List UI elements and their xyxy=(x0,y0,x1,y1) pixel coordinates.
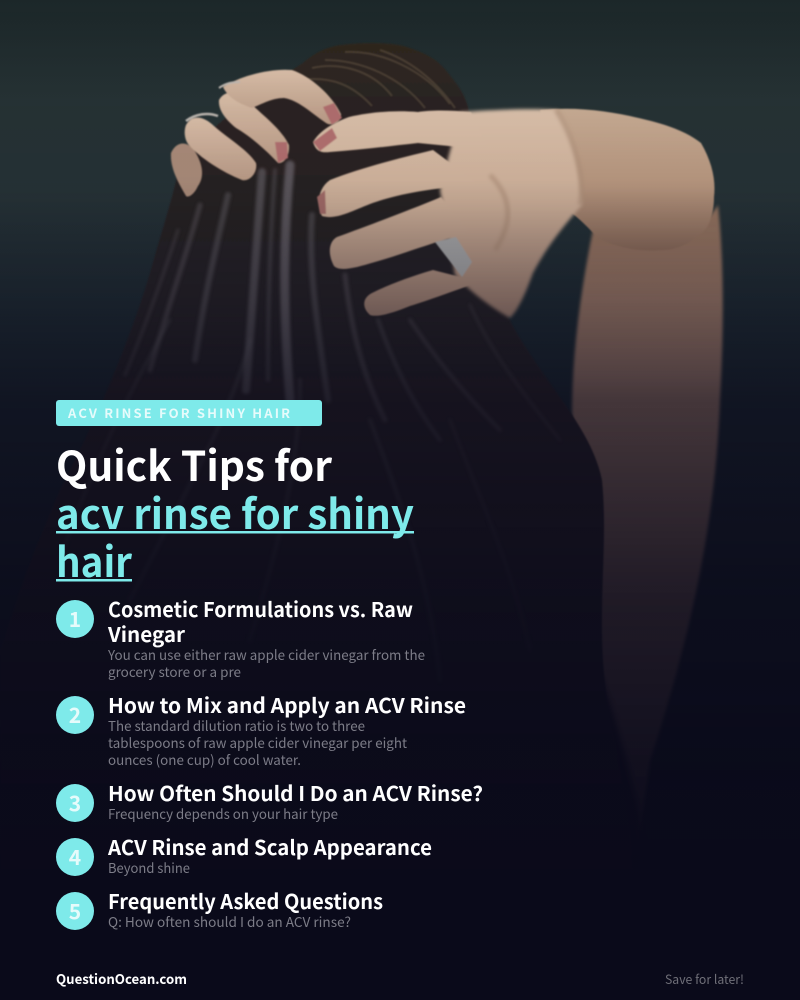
forearm xyxy=(540,109,714,251)
finger one xyxy=(223,70,341,124)
tip 3: Frequency depends on your hair type xyxy=(108,803,338,823)
tip 5: Q: How often should I do an ACV rinse? xyxy=(108,911,351,931)
title: acv rinse for shiny xyxy=(56,481,414,541)
middle finger xyxy=(319,150,480,217)
title: hair xyxy=(56,529,132,589)
tip 4: ACV Rinse and Scalp Appearance xyxy=(107,831,432,861)
upper arm xyxy=(560,205,723,830)
tip 1: Vinegar xyxy=(107,618,185,648)
tip 1 xyxy=(56,593,425,681)
badge: ACV RINSE FOR SHINY HAIR xyxy=(67,403,290,422)
tip 2: ounces (one cup) of cool water. xyxy=(108,749,301,769)
tip 4 xyxy=(56,831,432,877)
badge xyxy=(56,400,322,426)
title: Quick Tips for xyxy=(56,433,332,493)
tip 4: 4 xyxy=(69,842,81,872)
title xyxy=(56,433,414,589)
tip 2: The standard dilution ratio is two to three xyxy=(108,715,365,735)
tip 3: How Often Should I Do an ACV Rinse? xyxy=(108,777,483,807)
nail xyxy=(317,190,326,214)
tip 1: Cosmetic Formulations vs. Raw xyxy=(108,593,413,623)
ring xyxy=(219,82,240,88)
footer brand: QuestionOcean.com xyxy=(56,968,187,988)
finger three xyxy=(185,118,256,180)
right hand xyxy=(313,109,582,318)
nail xyxy=(275,142,288,163)
nail xyxy=(313,128,337,151)
little finger xyxy=(364,270,480,316)
ring xyxy=(186,114,218,121)
ring finger xyxy=(330,197,470,269)
left hand xyxy=(171,70,342,197)
wrist crease xyxy=(556,110,581,205)
tip 2: How to Mix and Apply an ACV Rinse xyxy=(108,689,466,719)
tip 2 xyxy=(56,689,466,769)
tip 3 xyxy=(56,777,483,823)
tip 5: 5 xyxy=(69,896,81,926)
hair mass xyxy=(0,43,634,955)
tip 5: Frequently Asked Questions xyxy=(108,885,383,915)
hair strands xyxy=(60,165,560,680)
tip 1: 1 xyxy=(69,604,81,634)
back and dress xyxy=(300,500,642,955)
hair crown highlights xyxy=(300,50,455,108)
tip 3: 3 xyxy=(69,788,81,818)
tip 2: tablespoons of raw apple cider vinegar per eight xyxy=(108,732,407,752)
index finger xyxy=(313,110,490,152)
silver ring xyxy=(435,237,472,277)
tip 5 xyxy=(56,885,383,931)
tip 4: Beyond shine xyxy=(108,857,190,877)
tip 2: 2 xyxy=(69,700,81,730)
tip 1: grocery store or a pre xyxy=(108,661,241,681)
tip 1: You can use either raw apple cider vinegar from the xyxy=(107,644,425,664)
lowest finger xyxy=(171,144,202,197)
palm xyxy=(440,109,582,318)
finger two xyxy=(219,93,289,163)
footer save note: Save for later! xyxy=(665,969,744,988)
nail xyxy=(323,103,342,125)
knuckle shade xyxy=(490,175,508,250)
